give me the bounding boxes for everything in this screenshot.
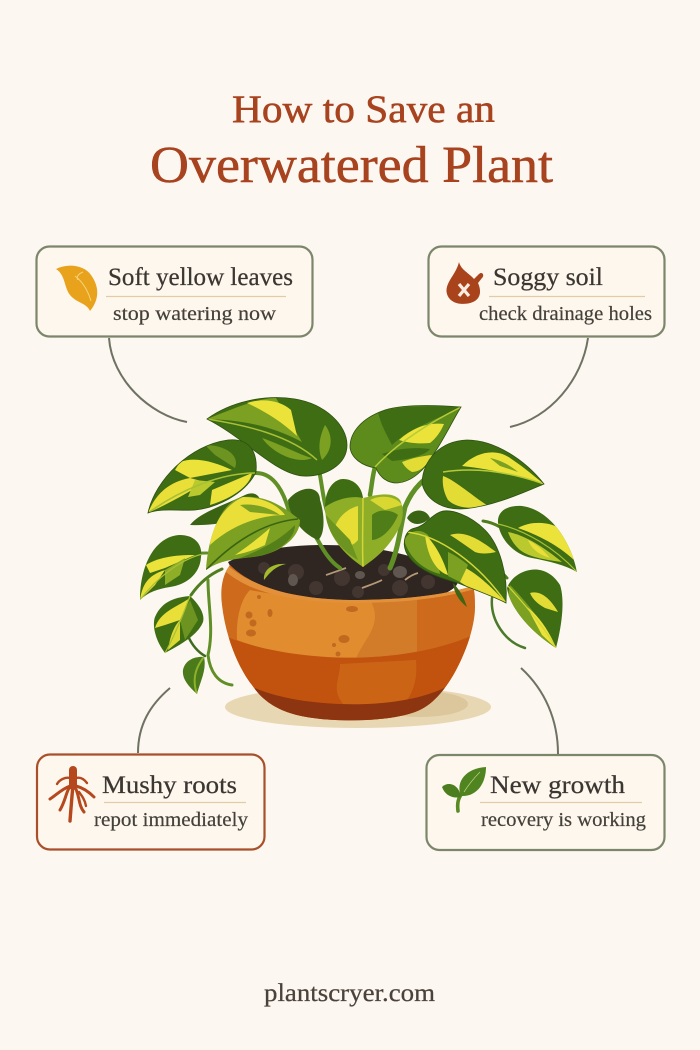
pot shadow	[225, 686, 491, 728]
action text: check drainage holes	[479, 304, 652, 325]
action text: stop watering now	[113, 304, 276, 325]
card: mushy roots	[37, 754, 264, 850]
pot	[221, 565, 475, 720]
card: soft yellow leaves	[36, 246, 312, 336]
connector: new growth to plant	[521, 668, 558, 754]
card: soggy soil	[428, 246, 664, 336]
icon: yellow leaf	[56, 266, 97, 311]
leaf: right small upper	[498, 506, 577, 572]
connector: soft yellow leaves to plant	[109, 338, 187, 422]
heading: New growth	[490, 772, 626, 799]
leaf: front right	[404, 510, 507, 604]
leaf: right large	[422, 440, 545, 510]
leaf: hanging over rim	[453, 583, 467, 607]
footer website: plantscryer.com	[264, 980, 436, 1007]
leaf: behind left	[190, 493, 260, 525]
leaf: front left	[206, 496, 300, 570]
icon: water drop with x	[447, 262, 483, 304]
title: How to Save an	[232, 88, 495, 131]
illustration: potted pothos plant	[138, 390, 580, 730]
leaf: center heart	[325, 479, 403, 567]
leaf: top left	[206, 397, 348, 476]
leaf: behind center	[288, 489, 324, 540]
connector: mushy roots to plant	[138, 688, 170, 753]
leaf: top right	[350, 405, 462, 484]
leaf: left upper	[148, 439, 257, 514]
title	[150, 88, 554, 194]
icon: roots	[50, 770, 94, 821]
soil	[228, 545, 458, 605]
heading: Mushy roots	[102, 772, 237, 799]
leaf: tiny lower left	[182, 656, 205, 694]
card: new growth	[426, 755, 664, 850]
heading: Soggy soil	[493, 264, 603, 291]
action text: repot immediately	[94, 810, 248, 831]
connector: soggy soil to plant	[510, 338, 588, 427]
icon: sprout	[442, 767, 486, 811]
action text: recovery is working	[481, 810, 646, 831]
leaf: small left	[140, 535, 202, 600]
leaf: small lower left	[154, 596, 204, 653]
vines and stems	[171, 460, 525, 685]
leaf: behind right	[407, 510, 430, 524]
heading: Soft yellow leaves	[108, 264, 293, 291]
leaf: right small lower	[507, 570, 563, 648]
title: Overwatered Plant	[150, 137, 554, 194]
